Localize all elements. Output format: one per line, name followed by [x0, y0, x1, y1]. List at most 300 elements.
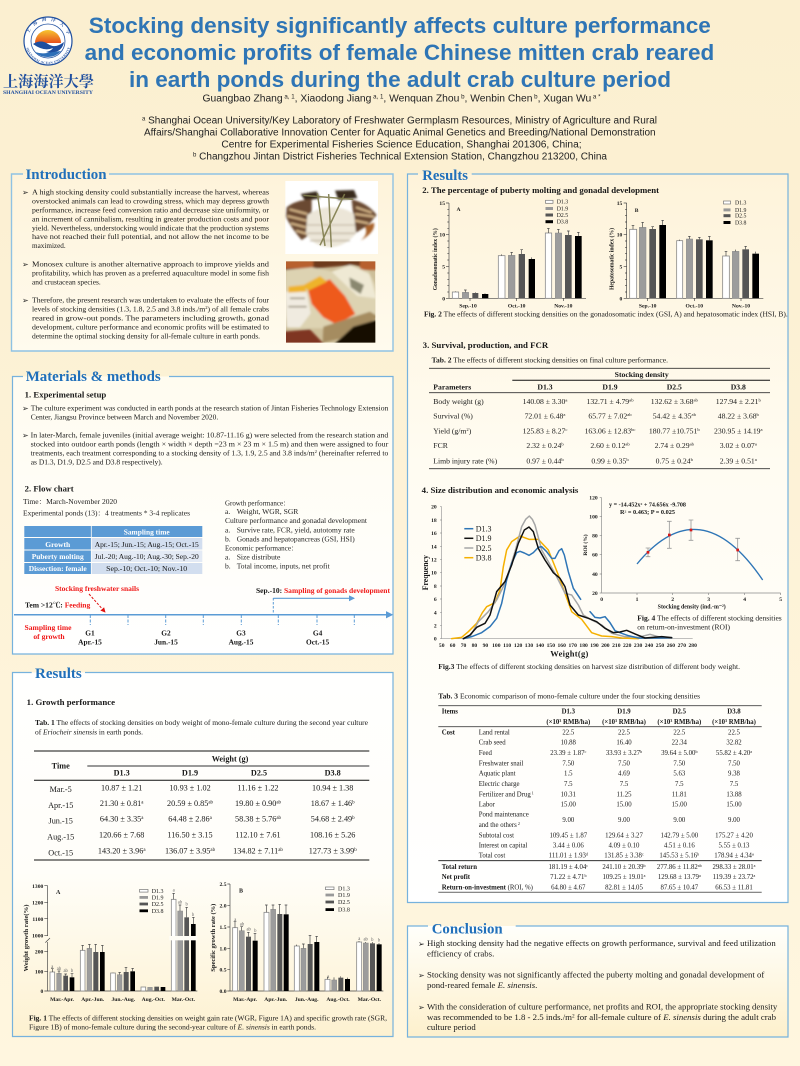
y axis ticks: 15: [617, 201, 623, 207]
regression equation: + 74.656x -9.708: [642, 503, 686, 509]
table 2 values: 163.06 ± 12.83: [585, 426, 631, 436]
text block: introduction bullets: ) of all female crabs: [208, 304, 269, 313]
table 2 header: Stocking density: [615, 370, 669, 379]
x axis labels: 70: [461, 643, 466, 649]
table 3 row labels: 2: [517, 821, 520, 826]
y axis ticks: 100: [35, 969, 44, 975]
affiliations: [142, 116, 657, 162]
table 2 values: b: [561, 457, 564, 462]
table 2 values: ab: [627, 412, 632, 417]
table 3 header: 3: [615, 718, 617, 723]
panel letter B: B: [239, 889, 243, 895]
table 1 row labels: Oct.-15: [48, 848, 73, 858]
text block: measured performance indicators: Total income, inputs, net profit: [237, 561, 331, 570]
table 3 row labels: Pond maintenance: [479, 812, 529, 819]
text block: introduction bullets: have not reached their full potential, and not allow the net income to be: [32, 232, 270, 241]
text block: measured performance indicators: a.: [225, 507, 230, 516]
table 2 values: 0.99 ± 0.35: [591, 456, 626, 466]
y axis ticks: 200: [35, 949, 44, 955]
legend: D2.5: [557, 213, 568, 219]
table 3 values: 142.79 ± 5.00: [660, 833, 699, 840]
table 3 values: 145.53 ± 5.16: [659, 853, 697, 860]
table 3 values: 23.39 ± 1.87: [550, 750, 585, 757]
table 2 values: ab: [692, 412, 697, 417]
y axis labels: 16: [431, 531, 437, 537]
table 3 values: 32.82: [726, 740, 742, 747]
panel letter A: A: [456, 207, 461, 213]
text block: measured performance indicators: Growth performance：: [225, 498, 290, 507]
table 2 values: 72.01 ± 6.48: [525, 412, 563, 420]
table 3 values: 7.50: [562, 760, 575, 767]
table 3 values: 4.09 ± 0.10: [609, 843, 640, 850]
table 3 values: ab: [698, 863, 702, 868]
y axis ticks: 0.0: [220, 989, 227, 995]
table 2 values: 2.74 ± 0.29: [655, 441, 690, 450]
table 1 caption: [35, 718, 369, 736]
table 2 row labels: ): [469, 426, 472, 436]
x axis labels: 0: [600, 597, 603, 603]
text block: time and ponds: Time：March-November 2020: [23, 497, 117, 506]
table 1 caption: Tab. 1 The effects of stocking densities on body weight of mono-female culture during the second year culture: [35, 718, 369, 727]
legend: [724, 201, 747, 227]
y axis ticks: 5: [442, 265, 445, 271]
legend: [140, 889, 164, 915]
table 1 header: [52, 754, 341, 778]
table 3 header: D3.8: [727, 709, 741, 716]
table 1: body weight: [34, 751, 369, 860]
table 3 header: (×10: [712, 719, 725, 726]
regression equation: [609, 502, 686, 516]
text block: measured performance indicators: Size distribute: [237, 552, 281, 561]
legend: D3.8: [338, 908, 350, 914]
table 2 row labels: 2: [466, 427, 469, 432]
text block: introduction bullets: reared in grow-out ponds. The parameters including growth, gonad: [32, 313, 269, 322]
legend: [464, 524, 491, 562]
x axis title: Weight(g): [550, 648, 588, 658]
table 2 values: ab: [690, 442, 695, 447]
table 3 values: 4.51 ± 0.16: [664, 843, 695, 850]
text block: introduction bullets: performance, increase feed conversion ratio and decrease size uniformity, or: [32, 205, 269, 214]
bar chart: figure 1B specific growth rate: a: [327, 975, 329, 980]
text block: introduction bullets: maximized.: [32, 241, 66, 250]
figure 2 caption: Fig. 2 The effects of different stocking densities on the gonadosomatic index (GSI, A) and hepatosomatic index (HSI, B).: [424, 309, 788, 318]
legend: D1.9: [152, 895, 164, 901]
table 2 row labels: FCR: [433, 441, 449, 450]
table 1 values: 127.73 ± 3.99: [309, 847, 354, 856]
table 1 row labels: Aug.-15: [47, 832, 74, 842]
arrow: sampling of gonads: [272, 598, 274, 615]
x axis labels: Oct.-10: [686, 304, 703, 310]
text block: experimental setup bullets: 2: [315, 449, 318, 454]
y axis ticks: 1.0: [220, 946, 227, 952]
text block: measured performance indicators: a.: [225, 552, 230, 561]
figure 4 caption: on return-on-investment (ROI): [637, 622, 731, 631]
subheading: experimental setup: 1. Experimental setup: [25, 390, 107, 400]
table 3 values: 15.00: [672, 802, 688, 809]
table 3 values: a: [752, 852, 754, 857]
subheading: growth performance: 1. Growth performance: [27, 697, 115, 707]
text block: introduction bullets: levels of stocking densities (1.3, 1.8, 2.5 and 3.8 inds./m: [32, 304, 203, 313]
bar chart: figure 1B specific growth rate: ab: [363, 937, 369, 942]
text block: experimental setup bullets: ➢: [22, 404, 29, 413]
figure 1 caption: Figure 1B) of mono-female culture during the second-year culture of E. sinensis in earth ponds.: [29, 1023, 316, 1032]
x axis labels: Sep.-10: [639, 304, 657, 310]
x axis labels: 100: [492, 643, 501, 649]
table 3 row labels: Electric charge: [479, 781, 520, 788]
table 3 values: 9.00: [673, 817, 686, 824]
table 3 row labels: Interest on capital: [479, 843, 528, 850]
text block: conclusion bullets: E. sinensis during the adult crab: [663, 1013, 771, 1022]
table 3 values: 4.69: [618, 771, 631, 778]
y axis labels: 8: [434, 584, 437, 590]
table 3 values: 33.93 ± 3.27: [606, 750, 640, 757]
title: and economic profits of female Chinese mitten crab reared: [85, 40, 714, 65]
table 3 values: a: [750, 749, 752, 754]
table 3 values: 22.5: [673, 730, 686, 737]
bar chart: figure 1B specific growth rate: b: [378, 938, 381, 943]
bar chart: figure 1A weight growth rate: b: [192, 913, 195, 918]
table 2 values: a: [761, 427, 763, 432]
regression equation: y = -14.452x: [609, 503, 639, 509]
x axis labels: 80: [472, 643, 477, 649]
x axis labels: 2: [671, 597, 674, 603]
table 3 values: 15.00: [616, 802, 632, 809]
table 1 values: b: [352, 800, 355, 806]
table 2 values: 54.42 ± 4.35: [653, 412, 692, 420]
table 3 values: a: [699, 873, 701, 878]
table 3 row labels: Cost: [442, 730, 456, 737]
table 3 header: RMB/ha): [727, 719, 756, 726]
table 2 values: b: [561, 442, 564, 447]
bar chart: figure 2A gonadosomatic index: [432, 200, 586, 310]
table 3 values: 39.64 ± 5.00: [661, 750, 695, 757]
bar chart: figure 1A weight growth rate: a: [51, 965, 53, 970]
legend: D3.8: [152, 909, 164, 915]
text block: introduction bullets: development, culture performance and economic profits will be estimated to: [32, 323, 269, 332]
y axis labels: 120: [589, 496, 598, 502]
figure 4 caption: Fig. 4 The effects of different stocking densities: [637, 614, 782, 623]
authors: , Wenbin Chen: [465, 94, 532, 104]
table 3 values: b: [695, 749, 697, 754]
table 3 values: 64.80 ± 4.67: [551, 884, 586, 891]
label: sampling time of growth: [24, 623, 72, 641]
authors: a *: [591, 94, 601, 100]
table 3 values: 7.50: [673, 760, 686, 767]
table 1 values: 58.38 ± 5.76: [235, 815, 276, 824]
table: sampling time: Sampling time: [124, 528, 170, 536]
subheading: puberty molting and gonadal development: 2. The percentage of puberty molting and gonadal development: [422, 185, 659, 195]
affiliations: Affairs/Shanghai Collaborative Innovation Center for Aquatic Animal Genetics and Breeding/National Demonstration: [144, 128, 656, 138]
table: sampling time: Growth: [45, 540, 71, 549]
panel: results left: [12, 666, 393, 1036]
table 3 header: 3: [725, 718, 727, 723]
bar chart: figure 1A weight growth rate: ab: [63, 969, 69, 974]
authors: a, 1: [283, 94, 295, 100]
title: in earth ponds during the adult crab culture period: [129, 67, 671, 92]
table 3 row labels: 1: [531, 790, 534, 795]
x axis labels: 230: [634, 643, 642, 649]
table 3 values: 11.25: [616, 791, 632, 798]
table 1 values: 120.66 ± 7.68: [99, 831, 144, 840]
y axis ticks: 0: [620, 296, 623, 302]
heading: results: Results: [422, 168, 468, 184]
table 1 values: a: [210, 816, 213, 821]
table 3 row labels: Total return: [442, 864, 477, 871]
table 3 values: b: [584, 873, 586, 878]
table 3 values: 111.01 ± 1.93: [549, 853, 586, 860]
table 3 values: 9.00: [728, 817, 741, 824]
text block: introduction bullets: 2: [205, 305, 208, 310]
photo: opened crab with roe: [286, 261, 376, 343]
regression equation: 2: [625, 509, 627, 513]
text block: experimental setup bullets: as D1.3, D1.9, D2.5 and D3.8 respectively).: [31, 458, 163, 467]
table 1 values: 54.68 ± 2.49: [311, 815, 352, 824]
table 1 row labels: Apr.-15: [48, 801, 73, 810]
text block: conclusion bullets: 2: [572, 1014, 575, 1019]
x axis labels: [459, 304, 573, 310]
legend: D2.5: [735, 214, 747, 220]
table 2 values: ab: [625, 442, 630, 447]
table 2 values: a: [755, 457, 757, 462]
table 3 values: 13.88: [726, 791, 742, 798]
x axis labels: 260: [667, 643, 675, 649]
labels: growth sampling points: G2: [161, 628, 171, 638]
table 3 header: RMB/ha): [672, 719, 701, 726]
table 2 values: b: [626, 457, 629, 462]
x axis labels: 110: [503, 643, 511, 649]
y axis labels: 80: [592, 534, 598, 540]
text block: experimental setup bullets: In later-March, female juveniles (initial average weight: 10.87-11.16 g) were selected from the research station and: [31, 430, 388, 439]
figure 1 caption: Fig. 1 The effects of different stocking densities on weight gain rate (WGR, Figure 1A) and specific growth rate (SGR,: [29, 1013, 387, 1022]
x axis labels: 280: [689, 643, 697, 649]
table 3 caption: Tab. 3 Economic comparison of mono-female culture under the four stocking densities: [438, 691, 700, 700]
data points: [647, 529, 739, 554]
table 3 row labels: [442, 730, 534, 891]
table 1 values: ab: [278, 848, 283, 853]
table 1 values: 116.50 ± 3.15: [167, 831, 213, 840]
x axis labels: 170: [569, 643, 577, 649]
subheading: size distribution and economic analysis: 4. Size distribution and economic analysis: [422, 485, 579, 495]
y axis title: ROI (%): [582, 534, 589, 556]
text block: introduction bullets: [22, 187, 270, 341]
legend: D1.9: [338, 893, 350, 899]
x axis labels: 210: [612, 643, 621, 649]
table 1 values: 64.30 ± 3.35: [100, 815, 141, 824]
table 2 values: [523, 397, 763, 466]
legend: D1.9: [476, 534, 491, 543]
bar chart: figure 2B hepatosomatic index: [608, 201, 763, 310]
bar chart: figure 1B specific growth rate: b: [371, 938, 374, 943]
table 3 values: 109.25 ± 19.01: [603, 874, 644, 881]
affiliations: Centre for Experimental Fisheries Science Education, Shanghai 201306, China;: [221, 140, 582, 150]
x axis labels: 190: [590, 643, 599, 649]
table 2 values: 125.83 ± 8.27: [523, 426, 565, 436]
text block: conclusion bullets: High stocking density had the negative effects on growth performance, survival and feed utilization: [427, 939, 776, 948]
y axis title: Frequency: [420, 555, 430, 590]
table: sampling time: Jul.-20; Aug.-10; Aug.-30; Sep.-20: [95, 552, 199, 561]
x axis labels: Apr.-Jun.: [264, 997, 288, 1003]
table 2 values: 180.77 ±10.751: [649, 426, 697, 436]
x axis labels: Nov.-10: [554, 304, 573, 310]
table 3 values: 241.10 ± 20.39: [602, 864, 644, 871]
table 1 values: 143.20 ± 3.96: [98, 847, 143, 856]
table 2 values: 3.02 ± 0.07: [720, 441, 755, 450]
text block: conclusion bullets: culture period: [427, 1023, 476, 1032]
table 1 row labels: [47, 785, 74, 858]
table 3 values: 66.53 ± 11.81: [715, 884, 753, 891]
legend: D1.9: [557, 206, 568, 212]
table 3 values: 71.22 ± 4.71: [550, 874, 584, 881]
bar chart: figure 1B specific growth rate: ab: [246, 928, 252, 933]
bar chart: figure 1A weight growth rate: ab: [178, 901, 183, 906]
table 2 values: b: [757, 412, 760, 417]
scatter chart: figure 4 return on investment: [582, 496, 782, 610]
y axis ticks: [617, 201, 623, 302]
table 2 header: D3.8: [731, 382, 746, 392]
legend: D3.8: [557, 220, 568, 226]
table 3 values: 9.38: [728, 771, 741, 778]
text block: introduction bullets: an increment of cannibalism, resulting in greater production costs and poor: [32, 214, 269, 223]
text block: conclusion bullets: Stocking density was not significantly affected the puberty molting and gonadal development of: [427, 970, 765, 980]
table 3 values: 7.5: [620, 781, 629, 788]
table 2 header: D2.5: [667, 382, 682, 392]
curve: D3.8: [452, 536, 638, 639]
text block: introduction bullets: determine the optimal stocking density for all-female culture in earth ponds.: [32, 332, 260, 341]
panel: materials and methods: [12, 369, 393, 654]
x axis labels: 180: [579, 643, 588, 649]
bar chart: figure 1B specific growth rate: ab: [240, 922, 245, 927]
x axis labels: Mar.-Apr.: [233, 997, 258, 1003]
photo: whole tied crab: [285, 181, 378, 254]
y axis ticks: 5: [620, 265, 623, 271]
university logo: 上海海洋大学: [27, 18, 70, 34]
y axis ticks: 2.5: [220, 882, 227, 888]
text block: conclusion bullets: With the consideration of culture performance, net profits and ROI, the appropriate stocking density: [427, 1002, 778, 1012]
text block: introduction bullets: overstocked animals can lead to crowding stress, which may depress growth: [32, 196, 269, 205]
authors: b: [459, 94, 465, 100]
bar chart: figure 1B specific growth rate: a: [234, 918, 236, 923]
table 3 row labels: Feed: [479, 750, 493, 757]
subheading: survival, production and FCR: 3. Survival, production, and FCR: [423, 340, 549, 350]
table 3 values: 15.00: [726, 802, 742, 809]
x axis labels: 270: [678, 643, 686, 649]
curve: quadratic fit: [637, 529, 763, 580]
label: sampling of gonads development: Sep.-10: Sampling of gonads development: [256, 586, 390, 595]
title: [85, 13, 714, 92]
label: temperature and feeding: Tem >12℃: Feeding: [25, 601, 91, 610]
text block: experimental setup bullets: [22, 403, 389, 467]
x axis labels: Sep.-10: [459, 304, 477, 310]
x axis labels: [50, 997, 196, 1003]
table 3 header: (×10: [602, 719, 615, 726]
table 3 values: 15.00: [561, 802, 577, 809]
table 1 row labels: Mar.-5: [50, 785, 72, 794]
y axis labels: 100: [589, 515, 598, 521]
table 2 values: ab: [693, 397, 699, 402]
y axis title: Specific growth rate (%): [210, 904, 217, 972]
table 1 values: 10.93 ± 1.02: [169, 783, 211, 792]
y axis ticks: 10: [439, 233, 445, 239]
table 2 values: a: [563, 412, 565, 417]
table 1 values: 64.48 ± 2.86: [168, 815, 210, 824]
legend: [546, 200, 568, 226]
table 2 values: a: [565, 397, 567, 402]
authors: Guangbao Zhang: [202, 94, 280, 104]
x axis labels: Jun.-Aug.: [295, 997, 319, 1003]
table 3 values: 277.86 ± 11.82: [657, 864, 698, 871]
table 1 values: a: [143, 848, 146, 853]
regression equation: = 0.463; P = 0.025: [626, 510, 675, 516]
table 2 values: 0.75 ± 0.24: [656, 456, 691, 466]
y axis labels: 10: [431, 571, 437, 577]
table 3 values: 22.5: [728, 730, 741, 737]
table 1 row labels: Jun.-15: [49, 816, 73, 826]
table 3 header: 3: [559, 718, 561, 723]
legend: D3.8: [735, 221, 747, 227]
table 2 caption: Tab. 2 The effects of different stocking densities on final culture performance.: [432, 356, 668, 365]
table 3 values: 298.33 ± 28.01: [713, 864, 754, 871]
labels: growth sampling points: Oct.-15: [306, 638, 329, 646]
text block: introduction bullets: Monosex culture is another alternative approach to improve yields and: [32, 259, 269, 268]
table 3 row labels: and the others: [479, 822, 517, 829]
bar chart: figure 1A weight growth rate: ab: [57, 967, 62, 972]
regression equation: R: [620, 510, 624, 516]
table 3 values: 22.5: [618, 730, 631, 737]
text block: measured performance indicators: Gonads and hepatopancreas (GSI, HSI): [237, 534, 355, 543]
table 3 values: b: [640, 749, 642, 754]
y axis labels: 12: [431, 558, 437, 564]
panel: results right: [408, 168, 788, 902]
table 2 row labels: Survival (%): [433, 412, 473, 420]
table 3 row labels: Crab seed: [479, 740, 506, 747]
table 1 values: a: [141, 816, 144, 821]
x axis labels: 150: [547, 643, 555, 649]
table 3 values: c: [585, 749, 587, 754]
table 3 values: 55.82 ± 4.20: [716, 750, 750, 757]
text block: conclusion bullets: was recommended to be 1.8 - 2.5 inds./m: [427, 1013, 562, 1022]
text block: measured performance indicators: a.: [225, 525, 230, 534]
y axis labels: 6: [434, 597, 437, 603]
table 2 values: 48.22 ± 3.68: [718, 412, 757, 420]
x axis labels: Mar.-Apr.: [50, 997, 75, 1003]
table 3 values: 16.40: [616, 740, 632, 747]
text block: experimental setup bullets: stocked into outdoor earth ponds (length × width × depth =23 m × 23 m × 1.5 m) and then were assigned to four: [31, 439, 389, 448]
x axis labels: Aug.-Oct.: [142, 997, 166, 1003]
x axis labels: Aug.-Oct.: [326, 997, 350, 1003]
table 1 values: 136.07 ± 3.95: [165, 847, 210, 856]
x axis labels: 140: [536, 643, 544, 649]
table 1 header: D3.8: [325, 768, 341, 778]
table 2 values: a: [755, 442, 757, 447]
table 3 values: 7.50: [618, 760, 631, 767]
bar chart: figure 1A weight growth rate: [23, 884, 197, 1003]
y axis labels: 0: [434, 637, 437, 643]
table 3 values: b: [644, 863, 646, 868]
table 2 values: 2.32 ± 0.24: [526, 441, 561, 450]
y axis labels: 20: [431, 505, 437, 511]
heading: conclusion: Conclusion: [432, 922, 503, 938]
text block: experimental setup bullets: ➢: [22, 431, 29, 440]
table 3 values: c: [642, 852, 644, 857]
x axis labels: [600, 597, 782, 603]
text block: measured performance indicators: b.: [225, 561, 231, 570]
table 1 values: ab: [276, 816, 282, 821]
x axis labels: 220: [623, 643, 632, 649]
table 3 values: 9.00: [618, 817, 631, 824]
y axis ticks: 0.5: [220, 968, 227, 974]
regression equation: 2: [640, 502, 643, 506]
table 3 row labels: Aquatic plant: [479, 771, 516, 778]
